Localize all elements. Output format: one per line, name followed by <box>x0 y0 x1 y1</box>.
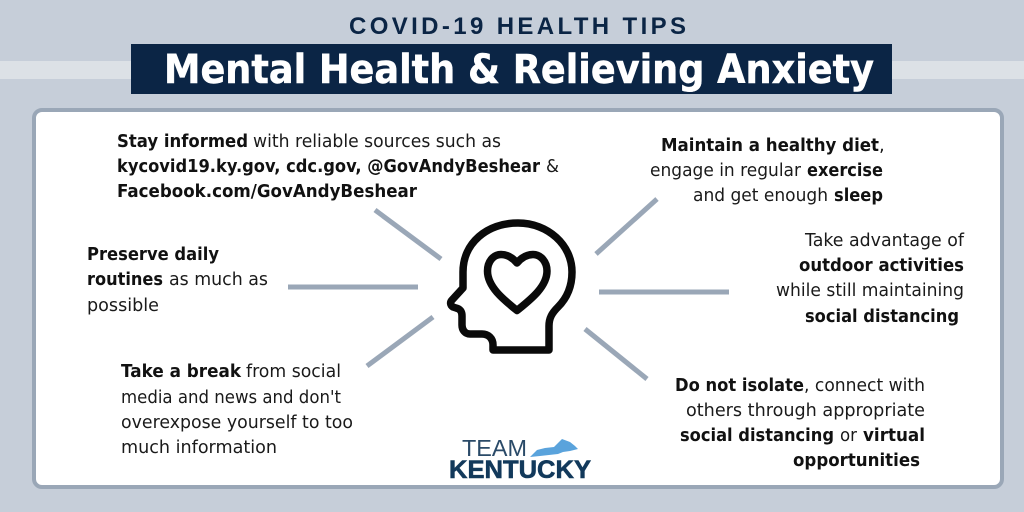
heading: COVID-19 Health Tips: COVID-19 HEALTH TIPS <box>349 13 686 40</box>
tip: stay informed <box>117 131 559 202</box>
tip: preserve daily routines: routines <box>87 269 163 290</box>
tip: healthy diet: and get enough <box>693 185 828 206</box>
tip: do not isolate: others through appropriate <box>686 400 925 421</box>
tip: take a break: media and news and don't <box>121 387 341 408</box>
tip: preserve daily routines: possible <box>87 295 159 316</box>
tip: outdoor activities: social distancing <box>805 306 959 327</box>
tip: do not isolate: virtual <box>863 425 925 446</box>
tip: healthy diet: sleep <box>834 185 883 206</box>
logo: Team Kentucky <box>449 435 591 484</box>
connector lines radiating from head <box>288 199 729 379</box>
tip: healthy diet: exercise <box>807 160 883 181</box>
tip: take a break: overexpose yourself to too <box>121 412 353 433</box>
tip: healthy diet: engage in regular <box>650 160 802 181</box>
tip: stay informed: kycovid19.ky.gov, cdc.gov, @GovAndyBeshear <box>117 156 540 177</box>
tip: do not isolate: , connect with <box>804 375 925 396</box>
tip: stay informed: Facebook.com/GovAndyBeshear <box>117 181 417 202</box>
icon: head with heart <box>451 223 572 350</box>
tip: outdoor activities: while still maintaining <box>776 280 964 301</box>
tip: preserve daily routines: Preserve daily <box>87 244 219 265</box>
tip: do not isolate: social distancing <box>680 425 834 446</box>
tip: outdoor activities: outdoor activities <box>799 255 964 276</box>
tip: preserve daily routines <box>87 244 268 316</box>
tip: stay informed: with reliable sources such as <box>253 131 501 152</box>
logo: Team Kentucky: TEAM <box>462 435 527 461</box>
tip: do not isolate: or <box>840 425 858 446</box>
title banner: Mental Health & Relieving Anxiety <box>164 47 874 93</box>
tip: healthy diet: Maintain a healthy diet <box>661 135 879 156</box>
tip: take a break: Take a break <box>121 361 242 382</box>
tip: do not isolate <box>675 375 925 471</box>
tip: healthy diet: , <box>879 135 885 156</box>
tip: take a break: much information <box>121 437 277 458</box>
tip: stay informed: Stay informed <box>117 131 248 152</box>
tip: take a break: from social <box>246 361 341 382</box>
tip: do not isolate: opportunities <box>793 450 920 471</box>
panel: tips <box>34 110 1002 487</box>
logo: Team Kentucky: KENTUCKY <box>449 456 591 484</box>
tip: do not isolate: Do not isolate <box>675 375 804 396</box>
tip: preserve daily routines: as much as <box>169 269 268 290</box>
tip: outdoor activities: Take advantage of <box>804 230 965 251</box>
tip: take a break <box>121 361 353 458</box>
tip: outdoor activities <box>776 230 965 327</box>
tip: healthy diet <box>650 135 885 206</box>
tip: stay informed: & <box>546 156 559 177</box>
